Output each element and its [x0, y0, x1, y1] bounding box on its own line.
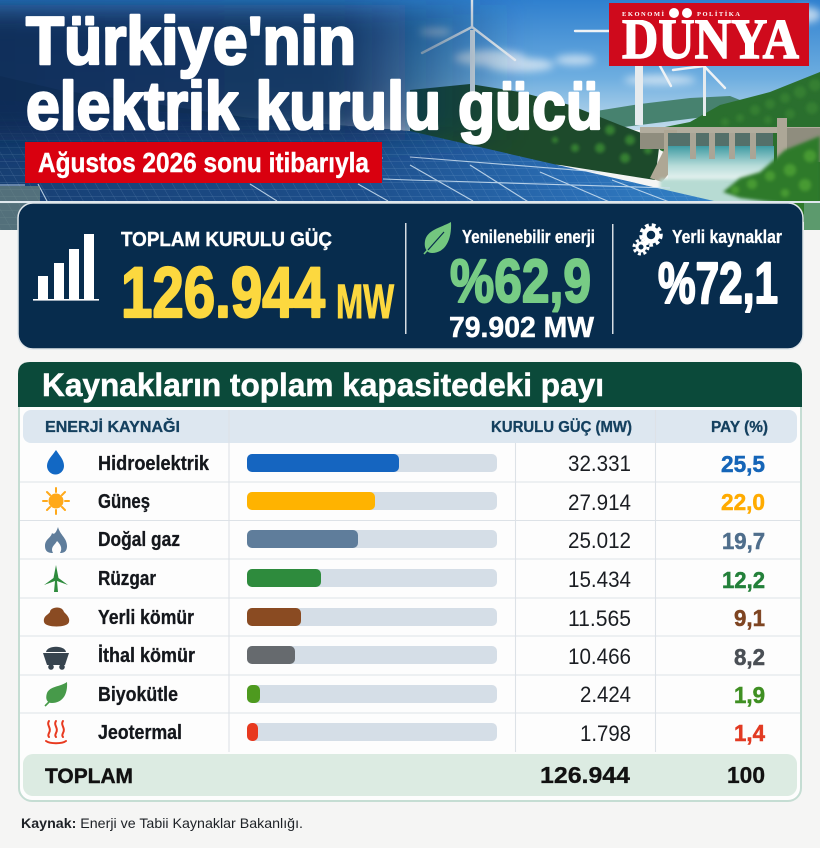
row: total — [23, 754, 797, 796]
row: Doğal gaz — [45, 527, 765, 554]
divider — [612, 224, 614, 334]
table column headers: ENERJİ KAYNAĞI — [45, 417, 180, 436]
logo: Dünya: POLİTİKA — [697, 11, 740, 18]
table column headers — [23, 410, 797, 443]
row: Yerli kömür: 9,1 — [734, 605, 765, 631]
row: Yerli kömür — [44, 605, 765, 631]
table column headers: KURULU GÜÇ (MW) — [491, 417, 632, 436]
row: Yerli kömür: Yerli kömür — [98, 607, 194, 629]
row: total: TOPLAM — [45, 765, 133, 788]
row: Jeotermal: 1,4 — [734, 720, 765, 746]
table heading — [18, 362, 802, 407]
row: Hidroelektrik — [47, 450, 765, 477]
icon: gears — [634, 225, 661, 254]
row: Güneş: Güneş — [98, 491, 150, 513]
row: Biyokütle: 1,9 — [734, 682, 765, 708]
hero photo: solar, wind and hydro — [0, 0, 820, 240]
domestic share: %72,1 — [658, 251, 778, 316]
row: Yerli kömür: 11.565 — [568, 606, 631, 631]
row: İthal kömür: 10.466 — [568, 644, 631, 669]
row: Rüzgar — [44, 565, 765, 593]
source note: Kaynak: Enerji ve Tabii Kaynaklar Bakanlığı. — [21, 815, 303, 831]
divider — [405, 223, 406, 334]
row: Biyokütle: Biyokütle — [98, 684, 178, 706]
row: İthal kömür: İthal kömür — [98, 644, 195, 667]
table heading: Kaynakların toplam kapasitedeki payı — [42, 367, 604, 403]
row: Biyokütle — [45, 682, 765, 708]
row: Güneş — [43, 488, 765, 515]
date badge — [25, 142, 382, 183]
row: Güneş: 22,0 — [721, 489, 765, 515]
row: İthal kömür: 8,2 — [734, 644, 765, 670]
logo: Dünya: DÜNYA — [622, 8, 799, 71]
row: Jeotermal — [46, 720, 765, 746]
title: Türkiye'nin — [26, 3, 356, 79]
total capacity value: 126.944 — [121, 254, 325, 333]
row: Rüzgar: 12,2 — [722, 567, 765, 593]
row: Jeotermal: Jeotermal — [98, 722, 182, 744]
forest texture — [552, 79, 820, 163]
renewable share: %62,9 — [450, 247, 591, 315]
row: Güneş: 27.914 — [568, 490, 631, 515]
row: Hidroelektrik: 25,5 — [721, 451, 765, 477]
row: Hidroelektrik: Hidroelektrik — [98, 453, 210, 475]
title — [26, 3, 603, 144]
date badge: Ağustos 2026 sonu itibarıyla — [38, 147, 369, 178]
renewable capacity: 79.902 MW — [449, 312, 595, 344]
row: İthal kömür — [43, 644, 765, 670]
row: Rüzgar: Rüzgar — [98, 568, 156, 590]
logo: Dünya: EKONOMİ — [622, 11, 664, 18]
dam — [640, 127, 820, 133]
row: total: 100 — [727, 762, 765, 788]
row: Doğal gaz: 25.012 — [568, 528, 631, 553]
renewable label: Yenilenebilir enerji — [462, 227, 595, 247]
panel: source table — [18, 362, 802, 801]
solar field — [0, 116, 714, 230]
table column headers: PAY (%) — [711, 419, 768, 436]
icon: bar chart — [33, 234, 99, 301]
row: Hidroelektrik: 32.331 — [568, 451, 631, 476]
row: total: 126.944 — [540, 762, 630, 788]
row: Doğal gaz: Doğal gaz — [98, 529, 180, 551]
row: Biyokütle: 2.424 — [580, 682, 631, 707]
total capacity label: TOPLAM KURULU GÜÇ — [121, 228, 332, 251]
total capacity unit: MW — [336, 276, 394, 329]
row: Rüzgar: 15.434 — [568, 567, 631, 592]
panel: key figures — [18, 203, 803, 349]
title: elektrik kurulu gücü — [26, 68, 603, 144]
row: Jeotermal: 1.798 — [580, 721, 631, 746]
row: Doğal gaz: 19,7 — [722, 528, 765, 554]
domestic label: Yerli kaynaklar — [672, 227, 782, 247]
icon: leaf — [424, 222, 451, 254]
